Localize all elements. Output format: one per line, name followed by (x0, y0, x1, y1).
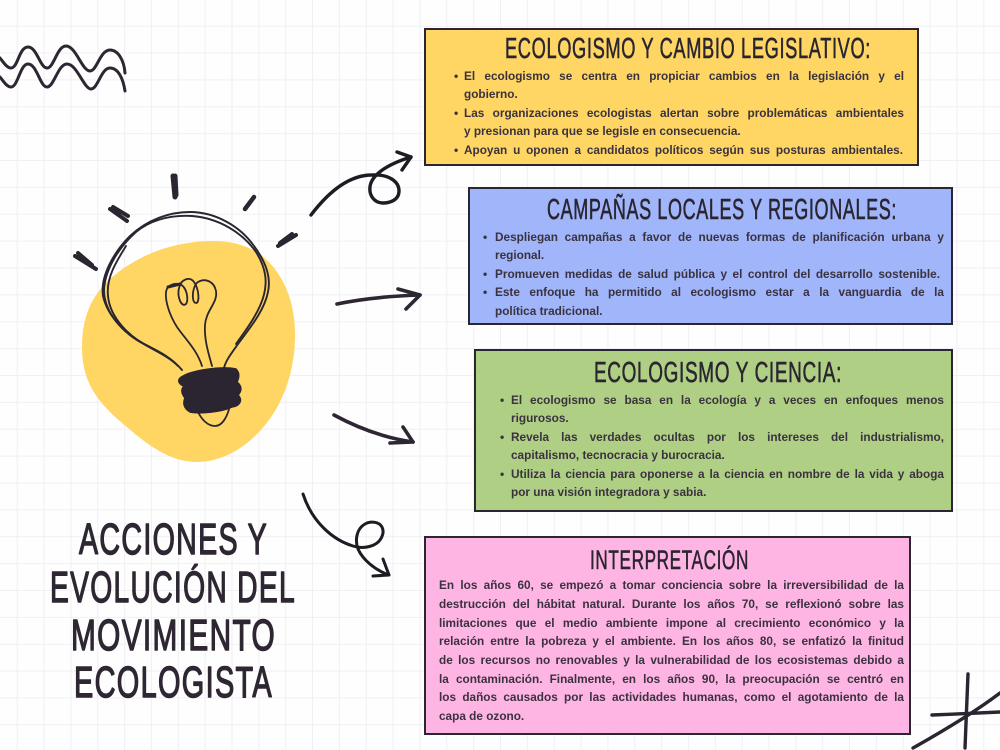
panel: ecologismo y cambio legislativo: Apoyan u oponen a candidatos políticos según sus posturas ambientales. (464, 143, 903, 157)
icon: light bulb (75, 176, 296, 426)
panel: ecologismo y ciencia: por una visión integradora y sabia. (511, 485, 706, 499)
heading: INTERPRETACIÓN (590, 544, 749, 575)
panel: interpretación: la contaminación. Finalmente, en los años 90, la preocupación se centró en (439, 672, 904, 686)
panel: interpretación (424, 536, 911, 735)
panel: ecologismo y ciencia: • (500, 393, 504, 407)
panel: ecologismo y cambio legislativo: y presionan para que se legisle en consecuencia. (464, 124, 741, 138)
panel: ecologismo y cambio legislativo: El ecologismo se centra en propiciar cambios en la legislación y el (464, 69, 904, 83)
arrow: to legislative panel (311, 152, 411, 215)
panel: interpretación: En los años 60, se empezó a tomar conciencia sobre la irreversibilidad de la (439, 578, 904, 592)
filament (166, 279, 216, 366)
panel: ecologismo y cambio legislativo: • (454, 143, 458, 157)
panel: ecologismo y cambio legislativo: • (454, 69, 458, 83)
panel: interpretación: limitaciones que el medio ambiente impone al crecimiento económico y la (439, 616, 904, 630)
arrow: to campaigns panel (337, 289, 420, 309)
panel: interpretación: los daños causados por las actividades humanas, como el agotamiento de la (439, 690, 904, 704)
title: ACCIONES Y (79, 515, 268, 564)
title: MOVIMIENTO (71, 611, 276, 660)
panel: campañas locales y regionales: • (483, 267, 487, 281)
panel: campañas locales y regionales: política tradicional. (495, 304, 603, 318)
panel: ecologismo y ciencia: Utiliza la ciencia para oponerse a la ciencia en nombre de la vida y aboga (511, 467, 944, 481)
title: ECOLOGISTA (74, 658, 273, 707)
panel: ecologismo y ciencia: Revela las verdades ocultas por los intereses del industrialismo, (511, 430, 944, 444)
light rays (75, 176, 296, 269)
panel: campañas locales y regionales: Este enfoque ha permitido al ecologismo estar a la vanguardia de la (495, 285, 944, 299)
arrow: to science panel (334, 415, 413, 443)
panel: campañas locales y regionales (468, 187, 953, 325)
panel: ecologismo y ciencia: • (500, 430, 504, 444)
bulb glass outline (103, 212, 269, 370)
arrow: to interpretation panel (303, 494, 389, 576)
panel: interpretación: relación entre la pobreza y el ambiente. En los años 80, se enfatizó la finitud (439, 634, 904, 648)
panel: campañas locales y regionales: • (483, 285, 487, 299)
icon: yellow blob (82, 241, 295, 462)
panel: campañas locales y regionales: Despliegan campañas a favor de nuevas formas de planificación urbana y (495, 230, 944, 244)
panel: interpretación: de los recursos no renovables y la vulnerabilidad de los ecosistemas debido a (439, 653, 904, 667)
panel: campañas locales y regionales: regional. (495, 248, 544, 262)
bulb tip (198, 405, 230, 426)
title (50, 515, 296, 707)
panel: campañas locales y regionales: • (483, 230, 487, 244)
panel: ecologismo y cambio legislativo: gobierno. (464, 87, 518, 101)
panel: ecologismo y cambio legislativo (424, 28, 919, 166)
panel: ecologismo y cambio legislativo: Las organizaciones ecologistas alertan sobre problemáticas ambientales (464, 106, 904, 120)
screw base (179, 368, 241, 413)
panel: ecologismo y ciencia: El ecologismo se basa en la ecología y a veces en enfoques menos (511, 393, 944, 407)
icon: squiggle decoration (0, 46, 125, 91)
panel: ecologismo y ciencia (474, 349, 953, 512)
icon: crossed lines (913, 674, 1000, 748)
title: EVOLUCIÓN DEL (50, 563, 296, 612)
panel: interpretación: destrucción del hábitat natural. Durante los años 70, se reflexionó sobre las (439, 597, 904, 611)
panel: ecologismo y ciencia: • (500, 467, 504, 481)
panel: interpretación: capa de ozono. (439, 709, 524, 723)
panel: ecologismo y cambio legislativo: • (454, 106, 458, 120)
panel: ecologismo y ciencia: rigurosos. (511, 411, 569, 425)
panel: ecologismo y ciencia: capitalismo, tecnocracia y burocracia. (511, 448, 725, 462)
panel: campañas locales y regionales: Promueven medidas de salud pública y el control del desarrollo sostenible. (495, 267, 940, 281)
